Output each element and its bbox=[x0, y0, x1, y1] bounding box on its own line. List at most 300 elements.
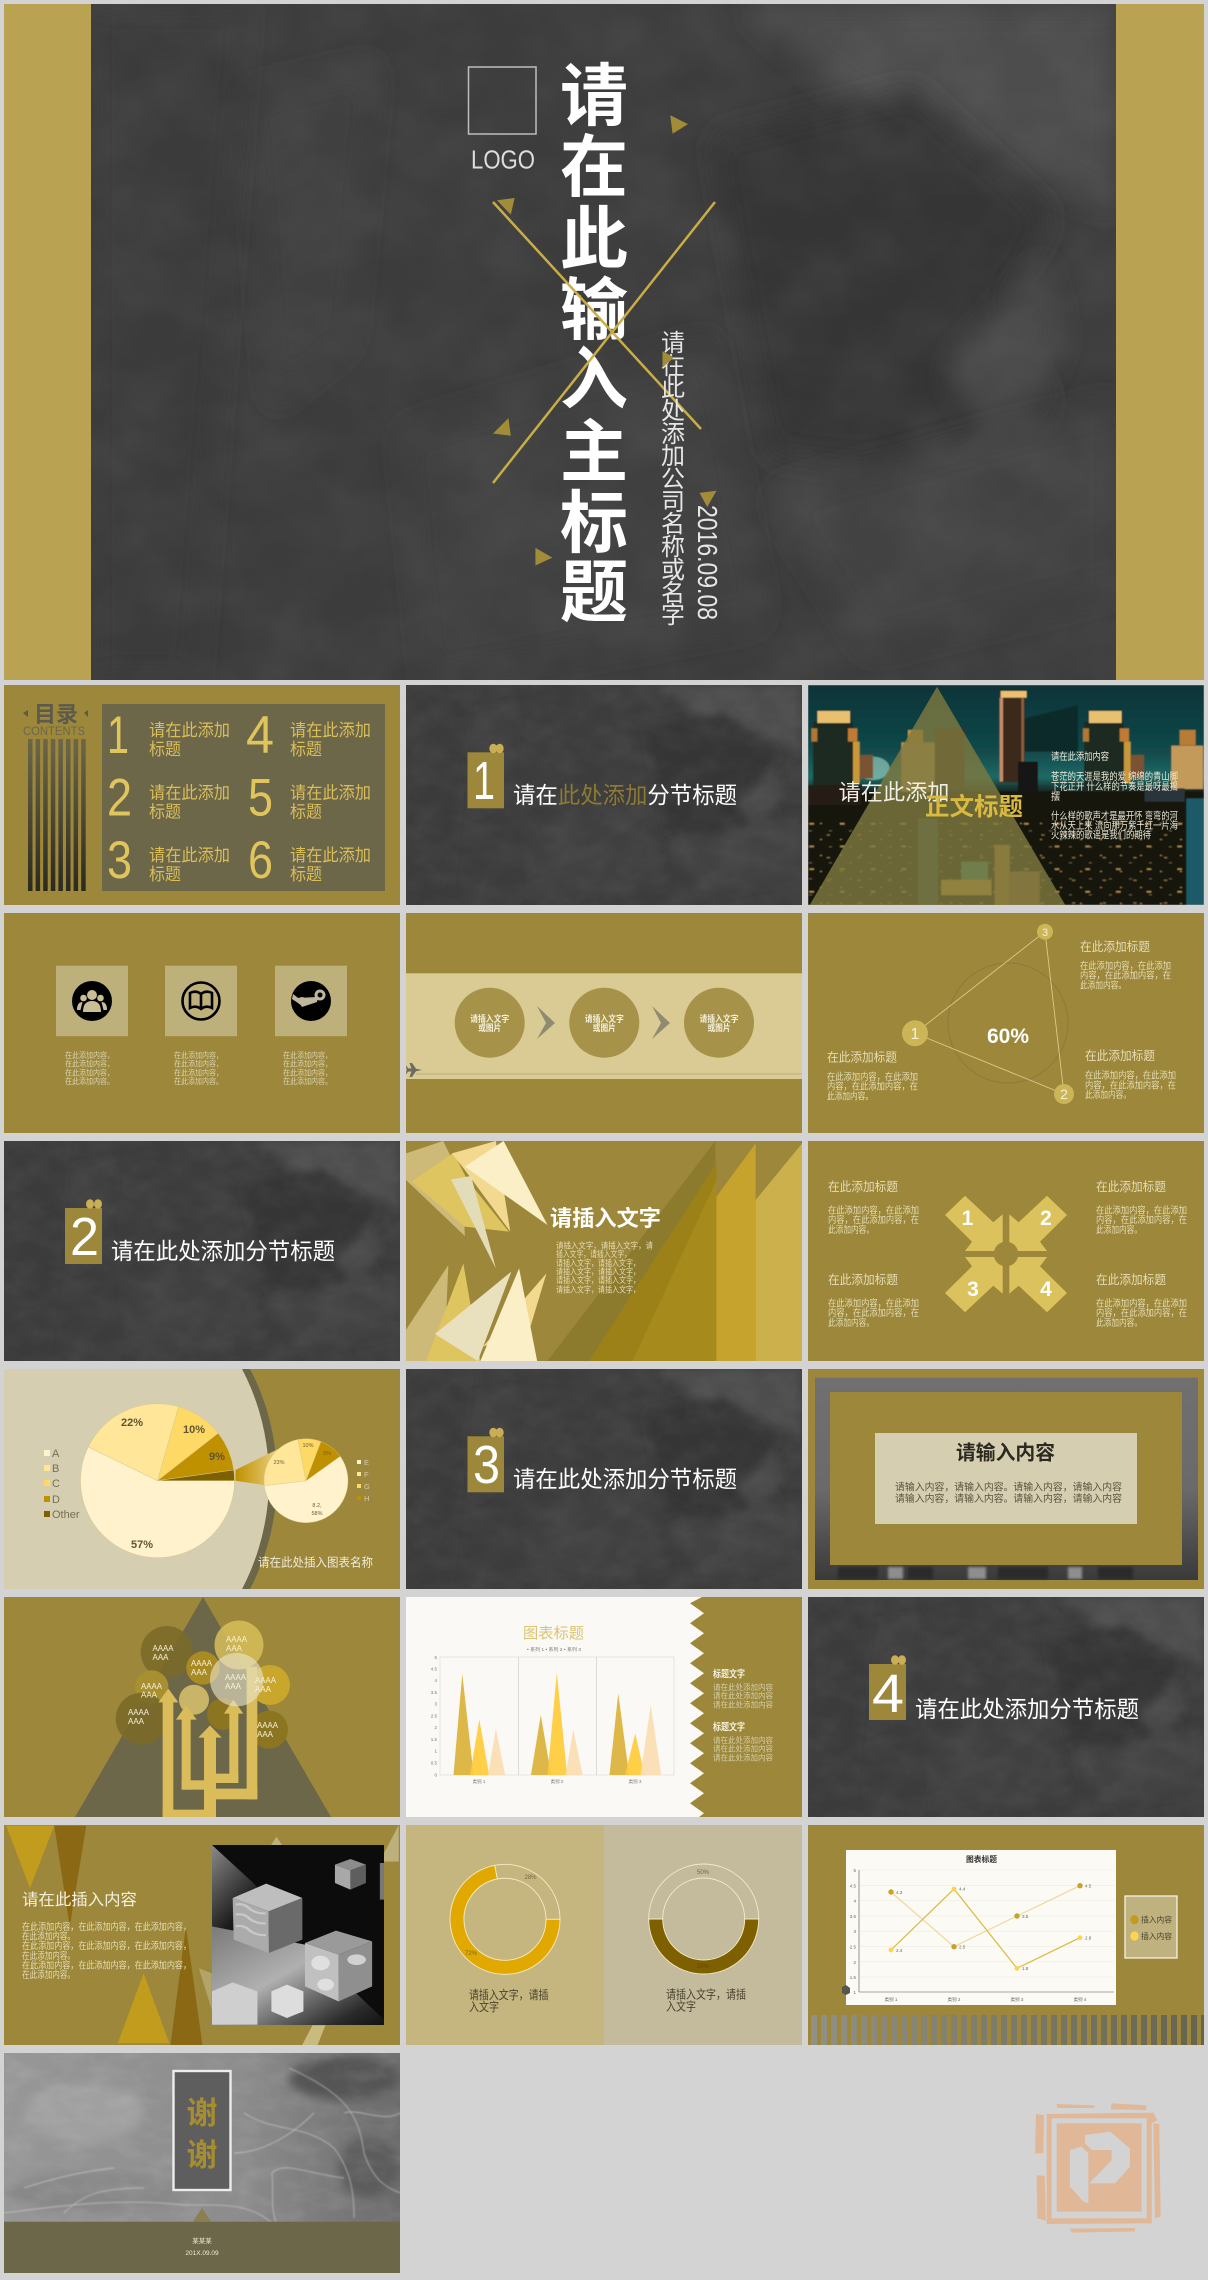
captions: 在此添加内容， bbox=[283, 1067, 332, 1077]
line chart card: 4.5 bbox=[1085, 1884, 1092, 1888]
contents labels: 标题 bbox=[149, 865, 181, 884]
main title: 主 bbox=[560, 415, 628, 491]
bubble labels: AAAA bbox=[226, 1635, 248, 1644]
panel: pie chart slide bbox=[4, 1369, 400, 1589]
triangle chart: 0 bbox=[434, 1772, 437, 1778]
lower shards bbox=[406, 1263, 546, 1361]
highlight bubble bbox=[210, 1653, 263, 1706]
step circles bbox=[455, 988, 754, 1058]
triangle chart: 2.5 bbox=[431, 1713, 437, 1718]
triangle chart: 3.5 bbox=[431, 1690, 437, 1695]
panel: section 1 slide bbox=[406, 685, 802, 905]
step circles: 请插入文字 bbox=[585, 1013, 624, 1024]
blurred photo frame bbox=[815, 1378, 1198, 1580]
paragraph: 在此添加内容。 bbox=[22, 1969, 75, 1980]
panel: contents slide bbox=[4, 685, 400, 905]
panel: section 2 slide bbox=[4, 1141, 400, 1361]
contents labels: 请在此添加 bbox=[290, 846, 371, 865]
secondary pie legend: G bbox=[364, 1482, 370, 1491]
zigzag side panel bbox=[690, 1597, 802, 1817]
secondary pie labels bbox=[273, 1443, 331, 1517]
side text 2: 请在此处添加内容 bbox=[713, 1744, 773, 1754]
paragraph: 在此添加内容。 bbox=[22, 1930, 75, 1942]
contents labels: 请在此添加 bbox=[290, 784, 371, 802]
bubble labels: AAA bbox=[257, 1730, 274, 1739]
line chart card: 4.5 bbox=[850, 1883, 856, 1888]
light band bbox=[406, 973, 802, 1079]
paragraph: 请插入文字，请插入文字， bbox=[556, 1266, 640, 1276]
cross diagram: 2 bbox=[1040, 1207, 1052, 1230]
diagonal colour bands bbox=[547, 1141, 802, 1361]
stripes bbox=[28, 739, 86, 891]
panel: image and text slide bbox=[4, 1825, 400, 2045]
panel: line chart slide bbox=[808, 1825, 1204, 2045]
text block top right: 此添加内容。 bbox=[1096, 1224, 1142, 1235]
panel: section 3 slide bbox=[406, 1369, 802, 1589]
section title: 请在此处添加分节标题 bbox=[513, 782, 737, 808]
line chart card: 2.4 bbox=[896, 1948, 903, 1953]
secondary pie labels: 8.2, bbox=[312, 1503, 322, 1509]
text block top left: 在此添加内容，在此添加 bbox=[828, 1204, 919, 1216]
gold triangles bbox=[493, 115, 716, 566]
stone background bbox=[91, 4, 1116, 680]
ring bbox=[948, 963, 1068, 1083]
line chart card: 类别 2 bbox=[948, 1996, 961, 2003]
step circles: 请插入文字 bbox=[470, 1013, 509, 1024]
panel: section 4 slide bbox=[808, 1597, 1204, 1817]
body text: 摆 bbox=[1051, 790, 1060, 803]
text block bottom left: 内容，在此添加内容，在 bbox=[828, 1307, 919, 1318]
triangle chart: 2 bbox=[434, 1725, 437, 1730]
contents labels bbox=[149, 721, 371, 884]
captions: 在此添加内容， bbox=[174, 1067, 223, 1077]
side text 1 bbox=[713, 1668, 773, 1709]
light content box bbox=[875, 1433, 1137, 1524]
paragraph: 在此添加内容，在此添加内容，在此添加内容， bbox=[22, 1940, 191, 1951]
bubbles bbox=[116, 1620, 290, 1749]
exploded fan bbox=[236, 1439, 298, 1485]
main title: 输 bbox=[560, 273, 628, 349]
company subtitle: 字 bbox=[661, 602, 685, 629]
line chart card: 1.5 bbox=[850, 1975, 856, 1980]
side bands bbox=[4, 4, 1204, 680]
caption left: 请插入文字，请插 bbox=[469, 1987, 548, 2002]
text block bottom left: 此添加内容。 bbox=[828, 1317, 874, 1328]
light content box: 请输入内容，请输入内容。请输入内容，请输入内容 bbox=[895, 1480, 1122, 1494]
line chart card: 2 bbox=[853, 1960, 856, 1965]
company subtitle: 称 bbox=[661, 534, 685, 561]
chart legend: • 系列 1 • 系列 2 • 系列 3 bbox=[527, 1646, 582, 1653]
percentage: 60% bbox=[987, 1025, 1029, 1048]
text block 3: 在此添加标题 bbox=[1080, 940, 1150, 954]
bubble labels: AAA bbox=[141, 1690, 158, 1700]
company subtitle bbox=[661, 330, 685, 629]
text block top left: 内容，在此添加内容，在 bbox=[828, 1214, 919, 1225]
secondary pie chart bbox=[264, 1439, 348, 1523]
contents list panel bbox=[102, 704, 385, 891]
text block top right bbox=[1096, 1180, 1187, 1235]
heading: 请在此插入内容 bbox=[22, 1891, 137, 1909]
text block 1: 此添加内容。 bbox=[827, 1090, 873, 1101]
chart caption: 请在此处插入图表名称 bbox=[258, 1554, 373, 1570]
secondary pie legend: H bbox=[364, 1494, 369, 1503]
captions: 在此添加内容。 bbox=[283, 1076, 332, 1086]
line chart card: 2.5 bbox=[959, 1944, 966, 1950]
text block bottom right: 在此添加标题 bbox=[1096, 1273, 1166, 1287]
bubble labels: AAA bbox=[128, 1717, 145, 1726]
contents heading bbox=[23, 702, 88, 738]
section title: 请在此处添加分节标题 bbox=[513, 1466, 737, 1492]
triangle chart: 类别 2 bbox=[551, 1778, 564, 1785]
triangle chart: 1 bbox=[434, 1749, 437, 1754]
stripes bbox=[808, 2015, 1204, 2045]
text block 2: 在此添加内容，在此添加 bbox=[1085, 1070, 1176, 1081]
captions: 在此添加内容， bbox=[283, 1050, 332, 1060]
logo placeholder bbox=[468, 67, 536, 174]
text block top left: 此添加内容。 bbox=[828, 1224, 874, 1235]
panel: cover slide bbox=[4, 4, 1204, 680]
side text 1: 请在此处添加内容 bbox=[713, 1691, 773, 1701]
numbered nodes bbox=[902, 924, 1074, 1104]
contents labels: 请在此添加 bbox=[149, 846, 230, 865]
line chart card bbox=[846, 1850, 1116, 2005]
text block 2: 在此添加标题 bbox=[1085, 1049, 1155, 1063]
vertical title box: 谢 bbox=[186, 2096, 218, 2131]
inner panel bbox=[830, 1392, 1182, 1565]
arrow: chevrons bbox=[537, 1006, 670, 1039]
pointer triangle bbox=[193, 2208, 211, 2222]
donut chart 72 percent: 72% bbox=[465, 1951, 478, 1957]
vertical title box bbox=[174, 2071, 230, 2190]
secondary pie legend: E bbox=[364, 1458, 369, 1467]
secondary pie labels: 10% bbox=[302, 1443, 314, 1449]
main pie legend: D bbox=[52, 1494, 60, 1506]
text block top right: 内容，在此添加内容，在 bbox=[1096, 1214, 1187, 1225]
bubble labels: AAA bbox=[255, 1685, 272, 1694]
donut chart 72 percent: 28% bbox=[524, 1875, 537, 1881]
contents labels: 请在此添加 bbox=[149, 721, 230, 740]
numbered nodes: 1 bbox=[911, 1026, 920, 1043]
triangle chart: 0.5 bbox=[431, 1760, 437, 1765]
secondary pie labels: 9% bbox=[323, 1451, 331, 1457]
paragraph: 在此添加内容，在此添加内容，在此添加内容， bbox=[22, 1960, 191, 1970]
bubble labels: AAAA bbox=[255, 1676, 277, 1685]
line chart card: 3.5 bbox=[850, 1914, 856, 1919]
body text: 火辣辣的歌谣是我们的期待 bbox=[1051, 829, 1151, 842]
vertical title box: 谢 bbox=[186, 2138, 218, 2173]
bubble labels: AAAA bbox=[128, 1708, 150, 1717]
icon: stamp logo bbox=[1035, 2103, 1161, 2233]
secondary pie legend: F bbox=[364, 1470, 369, 1479]
tile and steam icon bbox=[275, 966, 347, 1036]
company subtitle: 此 bbox=[661, 375, 685, 402]
main pie legend: Other bbox=[52, 1509, 80, 1521]
text block 1 bbox=[827, 1050, 918, 1101]
company subtitle: 公 bbox=[661, 466, 685, 493]
main title: 入 bbox=[560, 342, 628, 418]
panel: four arrows slide bbox=[808, 1141, 1204, 1361]
chart legend box: 插入内容 bbox=[1141, 1914, 1172, 1924]
upper shards bbox=[406, 1141, 547, 1268]
company subtitle: 请 bbox=[661, 330, 685, 357]
text block bottom right: 在此添加内容，在此添加 bbox=[1096, 1298, 1187, 1308]
translucent triangle bbox=[810, 687, 1065, 905]
paragraph: 在此添加内容，在此添加内容，在此添加内容， bbox=[22, 1921, 191, 1932]
bubble labels: AAAA bbox=[191, 1659, 213, 1668]
bubble labels: AAA bbox=[191, 1668, 208, 1677]
main pie legend bbox=[44, 1448, 80, 1521]
contents labels: 标题 bbox=[149, 740, 181, 759]
paragraph: 请插入文字，请插入文字，请 bbox=[556, 1240, 653, 1250]
caption right bbox=[666, 1986, 746, 2014]
panel: triangle bar chart slide bbox=[406, 1597, 802, 1817]
main title: 请 bbox=[560, 59, 628, 135]
main pie labels bbox=[121, 1417, 225, 1551]
step circles: 或图片 bbox=[593, 1022, 616, 1033]
panel: process flow slide bbox=[406, 913, 802, 1133]
background triangle bbox=[75, 1597, 331, 1817]
body text bbox=[1051, 750, 1178, 842]
presenter bbox=[185, 2237, 219, 2257]
contents numbers: 5 bbox=[248, 768, 273, 828]
company subtitle: 名 bbox=[661, 580, 685, 607]
line chart card: 5 bbox=[853, 1868, 856, 1873]
bubble labels: AAAA bbox=[152, 1644, 174, 1653]
bubble labels bbox=[128, 1635, 279, 1739]
panel: donut charts slide bbox=[406, 1825, 802, 2045]
panel: framed text slide bbox=[808, 1369, 1204, 1589]
panel: triangle percent slide bbox=[808, 913, 1204, 1133]
secondary pie legend bbox=[357, 1458, 370, 1503]
arc background bbox=[0, 1241, 277, 1717]
main pie legend: B bbox=[52, 1463, 59, 1475]
decorative triangles bbox=[6, 1825, 399, 2045]
heading: 请插入文字 bbox=[550, 1206, 661, 1231]
donut chart 50 percent: 50% bbox=[697, 1870, 710, 1876]
bubble labels: AAAA bbox=[225, 1673, 247, 1682]
numbered nodes: 3 bbox=[1042, 927, 1048, 939]
light content box: 请输入内容 bbox=[956, 1440, 1055, 1464]
line chart card: 3.5 bbox=[1022, 1914, 1029, 1919]
text block 2 bbox=[1085, 1049, 1176, 1100]
presenter: 201X.09.09 bbox=[185, 2250, 219, 2257]
step circles: 或图片 bbox=[478, 1022, 501, 1033]
bubble labels: AAA bbox=[225, 1682, 242, 1691]
company subtitle: 司 bbox=[661, 489, 685, 516]
caption right: 请插入文字，请插 bbox=[666, 1986, 746, 2002]
company subtitle: 加 bbox=[661, 443, 685, 470]
contents labels: 请在此添加 bbox=[290, 721, 371, 740]
main title: 题 bbox=[560, 555, 628, 631]
text block top right: 在此添加标题 bbox=[1096, 1180, 1166, 1194]
paragraph: 请插入文字，请插入文字， bbox=[556, 1258, 640, 1268]
panel: growth arrows slide bbox=[4, 1597, 400, 1817]
caption left bbox=[469, 1987, 548, 2014]
company subtitle: 在 bbox=[661, 353, 685, 380]
contents labels: 标题 bbox=[290, 802, 322, 822]
captions: 在此添加内容， bbox=[65, 1050, 114, 1060]
contents numbers: 3 bbox=[107, 831, 132, 890]
text block 3: 此添加内容。 bbox=[1080, 979, 1126, 990]
bubble labels: AAAA bbox=[141, 1682, 163, 1691]
body text: 下花正开 什么样的节奏是最呀最摇 bbox=[1051, 780, 1178, 793]
contents numbers: 1 bbox=[107, 706, 129, 765]
captions: 在此添加内容， bbox=[283, 1059, 332, 1069]
company subtitle: 或 bbox=[661, 557, 685, 584]
city photo bbox=[808, 685, 1204, 905]
number tile: 1 bbox=[473, 751, 495, 811]
line chart card: 类别 4 bbox=[1074, 1996, 1087, 2003]
text block bottom right bbox=[1096, 1273, 1187, 1328]
company subtitle: 处 bbox=[661, 398, 685, 425]
text block 3 bbox=[1080, 940, 1171, 990]
line chart card: 4 bbox=[853, 1899, 856, 1904]
paragraph bbox=[22, 1921, 191, 1980]
caption left: 入文字 bbox=[469, 1999, 499, 2014]
cross diagram bbox=[945, 1196, 1067, 1312]
text block bottom left: 在此添加标题 bbox=[828, 1273, 898, 1287]
triangle links bbox=[915, 932, 1064, 1094]
cross diagram: 4 bbox=[1040, 1278, 1052, 1301]
line chart card: 类别 3 bbox=[1011, 1996, 1024, 2003]
main pie labels: 57% bbox=[131, 1539, 153, 1551]
paragraph bbox=[556, 1240, 653, 1294]
triangle chart: 类别 3 bbox=[629, 1778, 642, 1785]
company subtitle: 名 bbox=[661, 511, 685, 538]
triangle chart: 5 bbox=[434, 1655, 437, 1660]
contents numbers: 4 bbox=[246, 706, 274, 765]
body text: 苍茫的天涯是我的爱 绵绵的青山脚 bbox=[1051, 770, 1178, 783]
text block 1: 在此添加标题 bbox=[827, 1050, 897, 1064]
side text 1: 标题文字 bbox=[713, 1668, 745, 1680]
bottom band bbox=[4, 2222, 400, 2273]
text block 3: 内容，在此添加内容，在 bbox=[1080, 970, 1171, 981]
number tile: 3 bbox=[473, 1435, 500, 1495]
presenter: 某某某 bbox=[192, 2237, 212, 2245]
chart legend box bbox=[1125, 1896, 1177, 1958]
slide title bbox=[838, 780, 1023, 821]
line chart card: 1 bbox=[853, 1990, 856, 1995]
date: 2016.09.08 bbox=[692, 505, 723, 620]
caption right: 入文字 bbox=[666, 1998, 696, 2014]
main pie labels: 10% bbox=[183, 1424, 205, 1436]
text block 3: 在此添加内容，在此添加 bbox=[1080, 960, 1171, 971]
captions bbox=[65, 1050, 332, 1086]
donut chart 72 percent bbox=[450, 1864, 560, 1974]
line chart card: 4.4 bbox=[959, 1886, 966, 1892]
text block top right: 在此添加内容，在此添加 bbox=[1096, 1204, 1187, 1216]
marker dot bbox=[842, 1985, 850, 1995]
paragraph: 请插入文字，请插入文字， bbox=[556, 1275, 640, 1285]
chart title: 图表标题 bbox=[523, 1625, 584, 1642]
line chart card: 3 bbox=[853, 1929, 856, 1934]
cross diagram: 3 bbox=[967, 1278, 979, 1301]
side text 2: 请在此处添加内容 bbox=[713, 1735, 773, 1745]
panel: three icon slide bbox=[4, 913, 400, 1133]
line chart card: 图表标题 bbox=[966, 1854, 997, 1864]
main title: 标 bbox=[560, 486, 628, 562]
side text 2: 标题文字 bbox=[713, 1720, 745, 1734]
panel: city photo title slide bbox=[808, 685, 1204, 905]
arrow: forked growth arrows bbox=[158, 1667, 257, 1817]
contents heading: 目录 bbox=[34, 702, 78, 727]
bubble labels: AAAA bbox=[257, 1721, 279, 1730]
chart legend box: 插入内容 bbox=[1141, 1931, 1172, 1941]
captions: 在此添加内容。 bbox=[65, 1076, 114, 1086]
line chart card: 2.5 bbox=[850, 1944, 856, 1950]
triangle chart: 3 bbox=[434, 1702, 437, 1707]
text block 1: 内容，在此添加内容，在 bbox=[827, 1081, 918, 1092]
secondary pie labels: 23% bbox=[273, 1460, 285, 1466]
contents numbers bbox=[107, 706, 274, 890]
paragraph: 插入文字，请插入文字， bbox=[556, 1249, 631, 1259]
main pie chart bbox=[81, 1404, 235, 1558]
text block bottom right: 此添加内容。 bbox=[1096, 1317, 1142, 1328]
slide title: 请在此添加 bbox=[838, 780, 950, 805]
numbered nodes: 2 bbox=[1060, 1086, 1068, 1102]
bubble labels: AAA bbox=[226, 1644, 243, 1653]
main pie labels: 22% bbox=[121, 1417, 143, 1429]
section title: 请在此处添加分节标题 bbox=[111, 1238, 335, 1264]
main title: 在 bbox=[560, 130, 628, 206]
main pie labels: 9% bbox=[209, 1451, 225, 1463]
slide title: 正文标题 bbox=[925, 793, 1023, 821]
contents heading: CONTENTS bbox=[23, 726, 85, 738]
paragraph: 在此添加内容。 bbox=[22, 1950, 75, 1961]
line chart card: 1.8 bbox=[1022, 1966, 1029, 1971]
donut chart 50 percent: 50% bbox=[697, 1964, 710, 1970]
text block bottom right: 内容，在此添加内容，在 bbox=[1096, 1307, 1187, 1318]
side text 1: 请在此处添加内容 bbox=[713, 1699, 773, 1709]
captions: 在此添加内容， bbox=[65, 1059, 114, 1069]
panel: thank you slide bbox=[4, 2053, 400, 2273]
water photo bbox=[4, 2053, 400, 2223]
line chart card: 4.3 bbox=[896, 1890, 903, 1895]
main pie legend: A bbox=[52, 1448, 60, 1460]
cross diagram: 1 bbox=[962, 1207, 974, 1230]
crossing lines bbox=[493, 202, 715, 483]
logo placeholder: LOGO bbox=[471, 144, 535, 174]
triangle chart: 4.5 bbox=[431, 1666, 437, 1672]
triangle chart bbox=[431, 1655, 674, 1785]
captions: 在此添加内容， bbox=[65, 1067, 114, 1077]
side text 2: 请在此处添加内容 bbox=[713, 1752, 773, 1762]
main pie legend: C bbox=[52, 1478, 60, 1490]
main title bbox=[560, 59, 628, 631]
text block 2: 此添加内容。 bbox=[1085, 1089, 1131, 1100]
contents numbers: 2 bbox=[107, 768, 132, 828]
tile and people icon bbox=[56, 966, 128, 1036]
contents labels: 标题 bbox=[290, 865, 322, 884]
contents numbers: 6 bbox=[248, 831, 273, 890]
step circles: 请插入文字 bbox=[700, 1013, 738, 1024]
body text: 请在此添加内容 bbox=[1051, 750, 1109, 763]
icon: plane bbox=[406, 1063, 422, 1077]
triangle chart: 4 bbox=[434, 1678, 437, 1683]
text block bottom left bbox=[828, 1273, 919, 1328]
triangle chart: 类别 1 bbox=[473, 1778, 486, 1785]
text block bottom left: 在此添加内容，在此添加 bbox=[828, 1298, 919, 1308]
company subtitle: 添 bbox=[661, 421, 685, 448]
text block 1: 在此添加内容，在此添加 bbox=[827, 1071, 918, 1082]
line chart card: 2.8 bbox=[1085, 1936, 1092, 1940]
paragraph: 请插入文字，请插入文字， bbox=[556, 1284, 640, 1294]
section title: 请在此处添加分节标题 bbox=[915, 1696, 1139, 1722]
cube image bbox=[212, 1845, 384, 2025]
number tile: 4 bbox=[872, 1664, 904, 1724]
number tile: 2 bbox=[70, 1207, 99, 1267]
text block top left bbox=[828, 1180, 919, 1235]
